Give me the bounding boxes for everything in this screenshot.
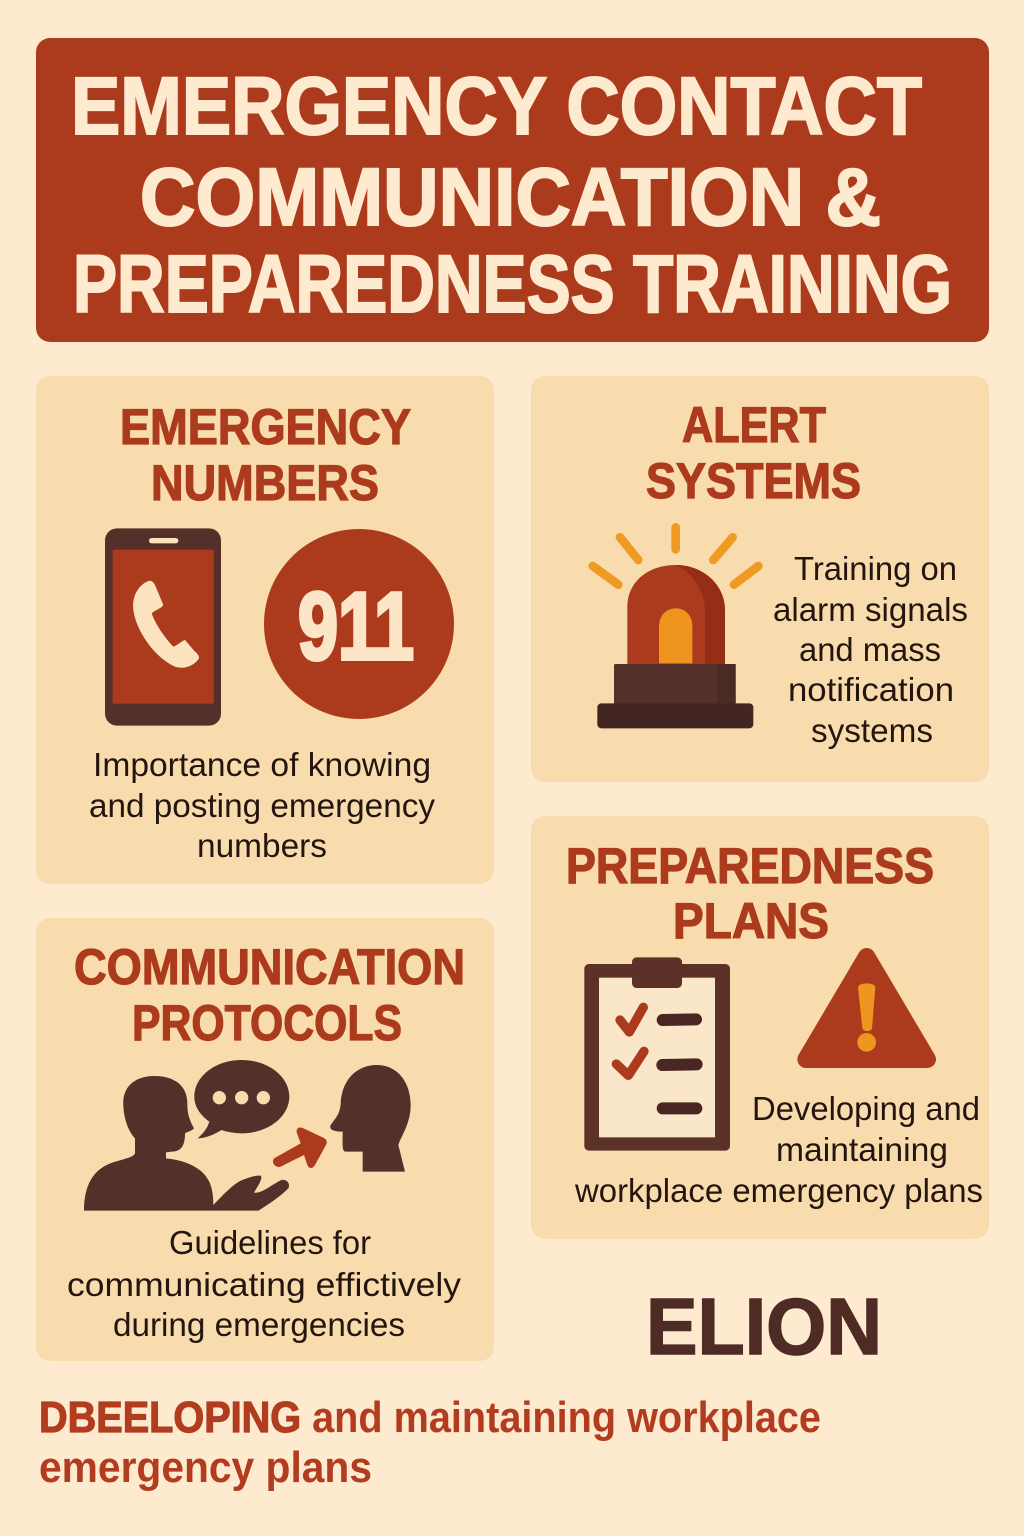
footer note <box>39 1393 821 1492</box>
text: alert systems description: and mass <box>799 631 941 668</box>
logo wordmark: ELION: ELION <box>646 1282 882 1371</box>
title line 1: EMERGENCY CONTACT <box>71 61 922 152</box>
icon: clipboard checklist <box>584 957 730 1151</box>
text: preparedness plans description: workplace emergency plans <box>574 1172 983 1209</box>
icon: two people communicating <box>84 1060 411 1211</box>
panel: alert systems <box>531 376 989 782</box>
footer note: DBEELOPING and maintaining workplace <box>39 1393 821 1442</box>
text: emergency numbers description: Importance of knowing <box>93 746 431 783</box>
text: communication protocols description: communicating effictively <box>67 1266 462 1303</box>
footer note: emergency plans <box>39 1443 372 1492</box>
icon: 911 circle: 911 <box>298 573 414 680</box>
heading: emergency numbers: NUMBERS <box>151 455 379 511</box>
heading: alert systems <box>646 397 861 509</box>
text: alert systems description <box>773 550 968 749</box>
text: communication protocols description: Guidelines for <box>169 1224 371 1261</box>
icon: 911 circle <box>264 529 454 719</box>
text: communication protocols description: during emergencies <box>113 1306 405 1343</box>
heading: preparedness plans: PREPAREDNESS <box>566 838 934 894</box>
text: communication protocols description <box>67 1224 462 1343</box>
text: emergency numbers description: and posting emergency <box>89 787 435 824</box>
heading: preparedness plans <box>566 838 934 949</box>
text: alert systems description: alarm signals <box>773 591 968 628</box>
text: alert systems description: Training on <box>794 550 957 587</box>
heading: emergency numbers <box>120 399 411 511</box>
text: emergency numbers description <box>89 746 435 864</box>
panel: preparedness plans <box>531 816 989 1239</box>
icon: warning triangle <box>806 957 927 1059</box>
text: preparedness plans description <box>574 1090 983 1209</box>
heading: communication protocols <box>74 939 465 1051</box>
text: preparedness plans description: Developing and <box>752 1090 980 1127</box>
heading: emergency numbers: EMERGENCY <box>120 399 411 455</box>
panel: communication protocols <box>36 918 494 1361</box>
heading: communication protocols: COMMUNICATION <box>74 939 465 995</box>
text: alert systems description: notification <box>788 671 954 708</box>
title line 2: COMMUNICATION & <box>140 152 881 243</box>
title banner <box>36 38 989 342</box>
heading: preparedness plans: PLANS <box>673 893 829 949</box>
heading: alert systems: ALERT <box>682 397 826 453</box>
text: alert systems description: systems <box>811 712 933 749</box>
text: preparedness plans description: maintaining <box>776 1131 948 1168</box>
heading: communication protocols: PROTOCOLS <box>132 995 402 1051</box>
panel: emergency numbers <box>36 376 494 884</box>
text: emergency numbers description: numbers <box>197 827 327 864</box>
icon: alarm beacon <box>593 527 758 728</box>
icon: smartphone with handset <box>105 528 221 726</box>
heading: alert systems: SYSTEMS <box>646 453 861 509</box>
